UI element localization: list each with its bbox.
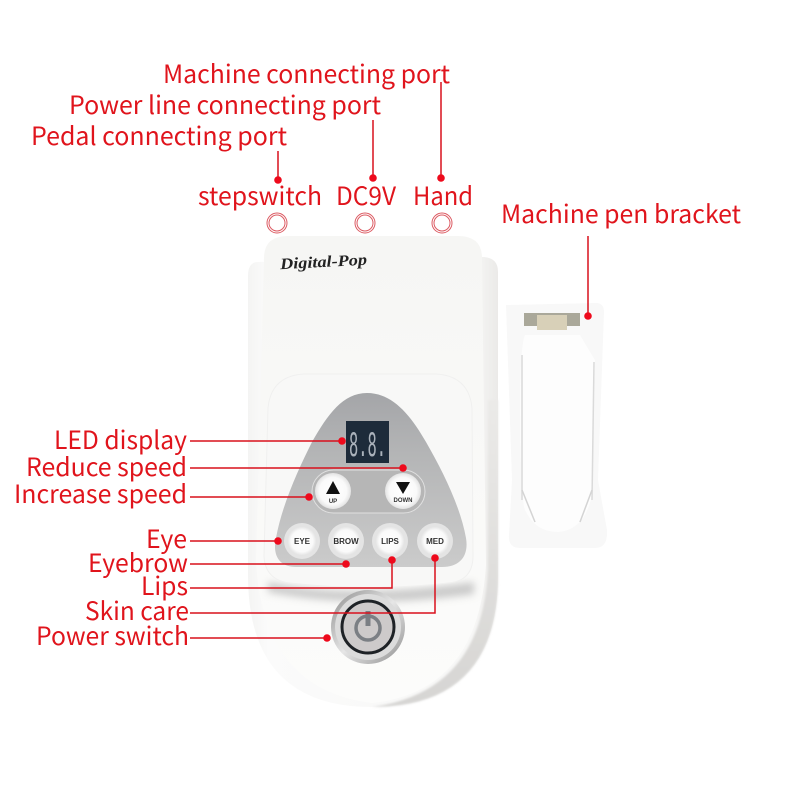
button: UP	[315, 473, 351, 509]
device body	[248, 236, 498, 707]
leader: Eye	[190, 537, 282, 545]
button: UP: UP	[329, 499, 337, 505]
label: stepswitch: stepswitch	[198, 177, 322, 213]
plate shadow	[268, 582, 474, 602]
button: EYE: EYE	[294, 537, 311, 546]
label: Power switch: Power switch	[36, 617, 189, 653]
label: Lips: Lips	[141, 567, 188, 603]
label: Eyebrow: Eyebrow	[88, 544, 188, 580]
leader: Eyebrow	[190, 560, 350, 568]
leader: LED display	[190, 437, 346, 445]
LED display	[346, 421, 389, 464]
leader: Power line connecting port	[369, 120, 377, 182]
leader: Pedal connecting port	[274, 151, 282, 184]
label: Machine pen bracket: Machine pen bracket	[501, 195, 742, 231]
leader: Power switch	[190, 634, 331, 642]
LED display: 8.8.	[349, 426, 386, 464]
leader: Machine pen bracket	[584, 236, 592, 320]
ring: DC9V port	[355, 213, 375, 233]
power switch	[331, 590, 405, 664]
control panel plate	[264, 374, 473, 588]
button: DOWN: DOWN	[394, 498, 412, 504]
leader: Skin care	[190, 554, 439, 613]
button: BROW: BROW	[333, 537, 359, 546]
leader: Lips	[190, 556, 396, 588]
label: Pedal connecting port: Pedal connecting port	[31, 117, 288, 153]
up/down pill	[312, 470, 425, 513]
button: MED	[417, 523, 453, 559]
leader: Machine connecting port	[437, 82, 445, 182]
label: DC9V: DC9V	[336, 177, 397, 213]
button: LIPS	[372, 523, 408, 559]
label: Hand: Hand	[413, 177, 473, 213]
label: Reduce speed: Reduce speed	[26, 448, 187, 484]
machine pen bracket	[506, 303, 607, 548]
label: Machine connecting port: Machine connecting port	[163, 55, 451, 91]
label: Skin care: Skin care	[85, 592, 189, 628]
button: BROW	[328, 523, 364, 559]
button: EYE	[284, 523, 320, 559]
button: DOWN	[385, 473, 421, 509]
brand logo: Digital-Pop	[279, 252, 367, 273]
label: Increase speed: Increase speed	[14, 475, 187, 511]
label: Eye: Eye	[146, 520, 187, 556]
gray button panel	[275, 393, 467, 567]
label: Power line connecting port: Power line connecting port	[69, 86, 382, 122]
ring: Hand port	[432, 213, 452, 233]
leader: Increase speed	[190, 493, 313, 501]
leader: Reduce speed	[190, 464, 407, 472]
ring: stepswitch port	[267, 213, 287, 233]
label: LED display: LED display	[54, 421, 187, 457]
button: LIPS: LIPS	[381, 537, 400, 546]
button: MED: MED	[426, 537, 444, 546]
